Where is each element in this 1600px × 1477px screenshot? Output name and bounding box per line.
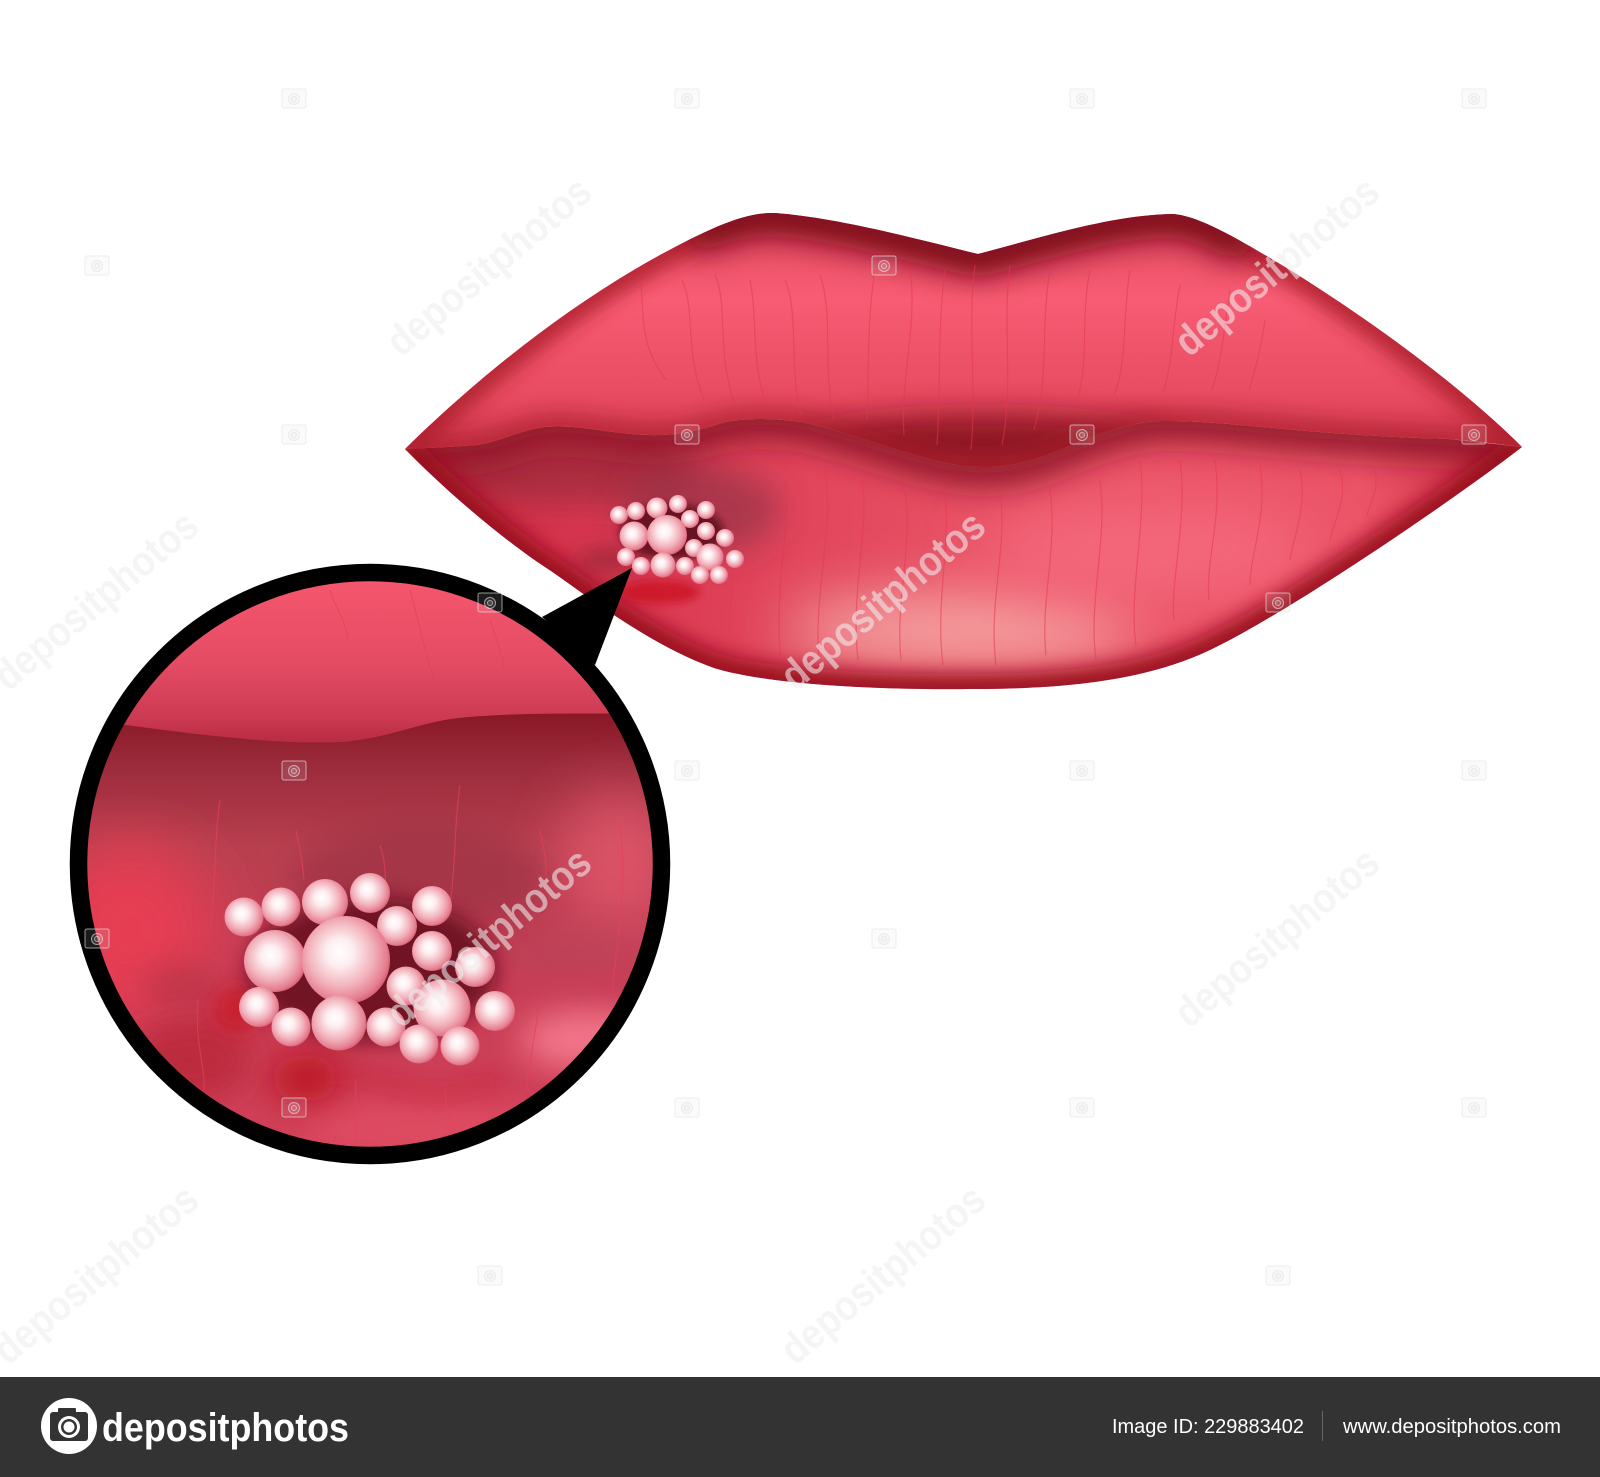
lips (400, 205, 1530, 695)
zoomed wrinkles (197, 590, 623, 1150)
watermarks: depositphotos (771, 501, 994, 699)
logo wordmark: depositphotos (102, 1406, 349, 1450)
footer bar (0, 1377, 1600, 1477)
watermarks: depositphotos (377, 167, 600, 365)
upper lip wrinkles (640, 265, 1265, 450)
pointer arrow (542, 568, 632, 665)
circle border (78, 572, 662, 1156)
lower lip (400, 415, 1530, 695)
zoomed lip detail (87, 581, 653, 1147)
image id: Image ID: 229883402 (1112, 1416, 1304, 1438)
website url: www.depositphotos.com (1342, 1416, 1561, 1438)
divider (1322, 1411, 1323, 1441)
lesion blisters on lip (610, 495, 744, 584)
lip lesion: cold sore shading (575, 465, 780, 604)
watermark camera icons (85, 89, 1486, 1285)
zoomed blisters (224, 873, 515, 1066)
watermarks: depositphotos (771, 1175, 994, 1373)
watermarks: depositphotos (1165, 838, 1388, 1036)
watermarks: depositphotos (377, 838, 600, 1036)
logo icon: camera (41, 1398, 97, 1454)
lower lip wrinkles (730, 460, 1376, 665)
watermarks: depositphotos (1165, 167, 1388, 365)
upper lip (400, 205, 1530, 475)
watermarks (0, 167, 1388, 1373)
magnifier circle (45, 564, 680, 1170)
